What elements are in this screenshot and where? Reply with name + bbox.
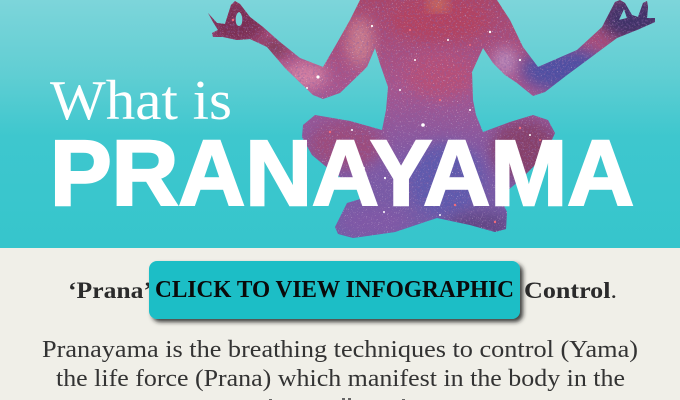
body paragraph: Pranayama is the breathing techniques to control (Yama) (42, 337, 638, 363)
body paragraph (42, 337, 638, 392)
click to view button (149, 261, 520, 319)
title: PRANAYAMA: PRANAYAMA (50, 121, 634, 225)
intro sentence, left fragment: ‘Prana’ (68, 278, 152, 303)
galaxy meditating silhouette (200, 0, 670, 245)
click to view button: CLICK TO VIEW INFOGRAPHIC (155, 277, 514, 303)
body paragraph: the life force (Prana) which manifest in the body in the (56, 366, 625, 392)
header background (0, 0, 680, 248)
intro sentence, right fragment: Control . (524, 278, 617, 303)
clipped tips of third text line (269, 398, 405, 400)
text panel background (0, 248, 680, 400)
title: What is: What is (50, 70, 232, 132)
